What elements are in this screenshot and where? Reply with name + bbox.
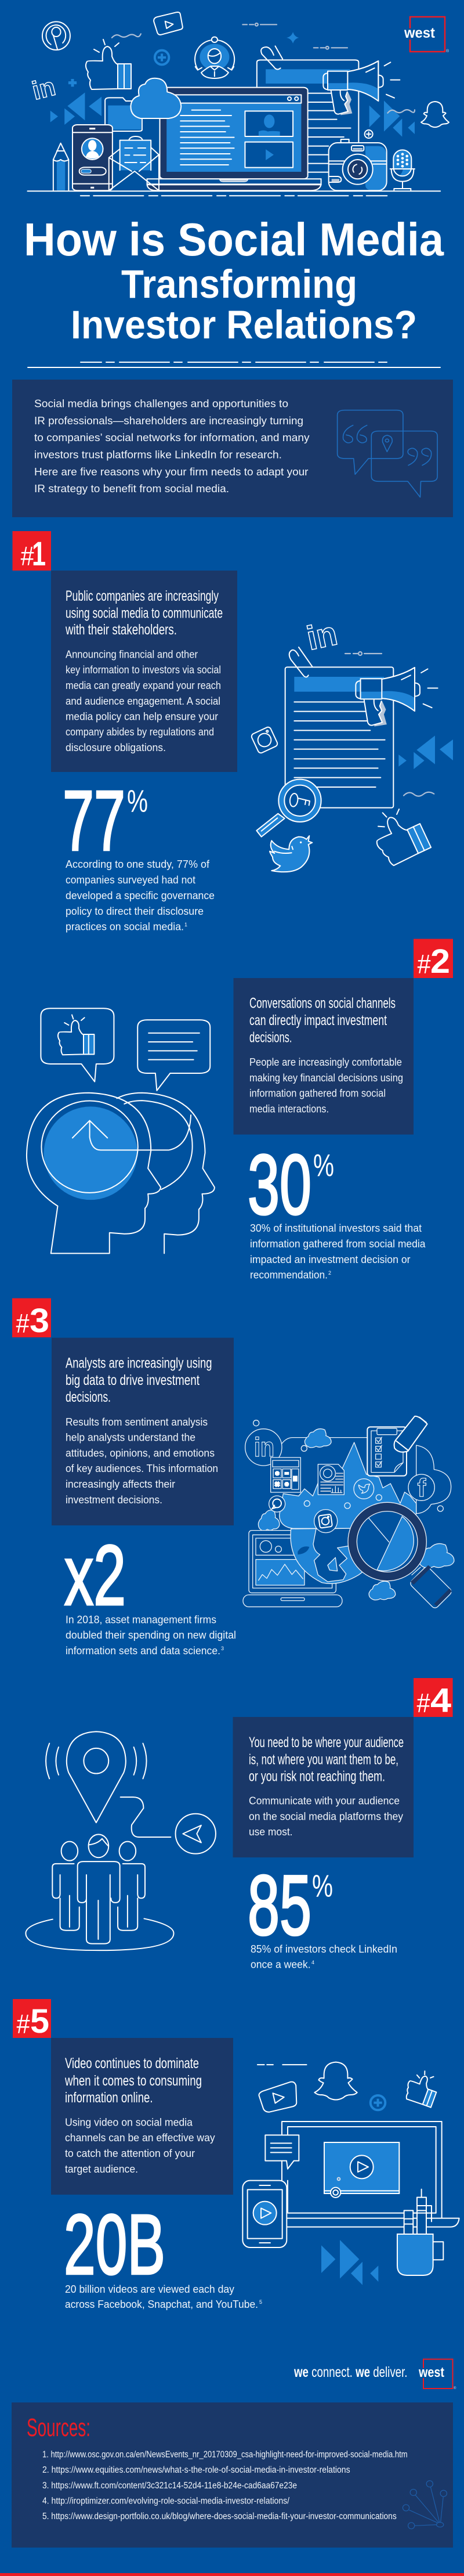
phone (242, 2181, 287, 2247)
panel: reason 1 (51, 571, 237, 772)
blue triangles (398, 735, 453, 769)
logo: west (404, 17, 449, 53)
monitor (282, 2122, 459, 2227)
logo: west: ® (446, 49, 449, 53)
icon: snapchat (421, 102, 449, 127)
bottom red bar (0, 2573, 464, 2576)
dash mark (258, 2064, 307, 2065)
calculator (271, 1457, 300, 1492)
icon: paper clip (261, 46, 282, 70)
icon: linkedin: in (30, 73, 58, 106)
badge: #4: # (416, 1688, 430, 1718)
logo: west footer: west (418, 2365, 444, 2380)
stat: 30%: 30 (248, 1138, 311, 1233)
panel: reason 4 (233, 1717, 414, 1857)
stat text: once a week. (251, 1958, 311, 1971)
dash mark (345, 652, 382, 655)
icon: twitter (270, 836, 312, 872)
logo: west footer (418, 2359, 456, 2390)
heading (64, 2055, 202, 2106)
squiggle (404, 792, 434, 796)
icon: thumbs up (86, 39, 131, 89)
section 3 (12, 1298, 454, 1657)
squiggle (387, 110, 415, 113)
stat text: information gathered from social media (250, 1238, 426, 1250)
stat: 85%: 85 (248, 1858, 311, 1953)
heads (27, 1093, 215, 1253)
stat: 30%: % (313, 1148, 334, 1183)
icon: pinterest (42, 21, 70, 50)
badge: #5: # (16, 2009, 30, 2039)
cloud connector (160, 118, 161, 179)
body (249, 1795, 404, 1838)
pin (67, 1731, 126, 1823)
body: information gathered from social (249, 1087, 386, 1099)
panel: reason 3 (52, 1338, 234, 1525)
stat text: 30% of institutional investors said that (250, 1222, 422, 1234)
badge: #1 (13, 531, 51, 573)
icon: twitter circle (354, 1479, 374, 1499)
heading: Public companies are increasingly (66, 588, 219, 604)
stat text: According to one study, 77% of (66, 858, 210, 870)
icon: thumbs up (58, 1015, 94, 1055)
sources list: 1. http://www.osc.gov.on.ca/en/NewsEvents_nr_20170309_csa-highlight-need-for-improved-social-media.htm (42, 2450, 408, 2460)
title: How is Social Media (24, 214, 444, 265)
body: to catch the attention of your (65, 2147, 195, 2159)
clipboard (367, 1427, 407, 1476)
comment bubble (265, 2135, 299, 2169)
stat text: 3 (221, 1646, 224, 1651)
sources list (42, 2450, 408, 2521)
phone (72, 125, 113, 190)
badge: #5: 5 (30, 2003, 49, 2040)
icon: microphone (390, 150, 415, 190)
heading (65, 588, 223, 638)
globe (291, 1528, 374, 1583)
laptop (243, 1531, 342, 1607)
intro text: IR strategy to benefit from social media. (34, 482, 229, 495)
ground line (27, 190, 440, 192)
icon: snapchat (314, 2062, 357, 2100)
icon: linkedin letters: in (254, 1432, 274, 1462)
section 2 (27, 939, 453, 1281)
body: media interactions. (249, 1102, 329, 1114)
stat: 77%: % (127, 784, 148, 819)
stat text (66, 858, 215, 933)
heading: Video continues to dominate (65, 2055, 199, 2072)
body: Results from sentiment analysis (66, 1416, 208, 1428)
dots (304, 1495, 443, 1511)
icon: thumbs up (366, 800, 432, 868)
stat text: information sets and data science. (66, 1644, 220, 1657)
laptop (147, 88, 321, 190)
heading: decisions. (66, 1389, 111, 1405)
body: investment decisions. (66, 1493, 162, 1506)
intro text: investors trust platforms like LinkedIn for research. (34, 449, 282, 461)
icon: megaphone (323, 61, 400, 115)
ground ellipse (26, 1918, 173, 1950)
mountain shape (280, 1442, 416, 1528)
intro text: Social media brings challenges and opportunities to (34, 398, 288, 410)
stat: x2: x2 (64, 1528, 126, 1623)
blue triangles (321, 2240, 378, 2285)
badge: #3: 3 (30, 1302, 49, 1340)
badge: #3 (12, 1298, 51, 1340)
heading: using social media to communicate (66, 605, 223, 622)
body: use most. (249, 1825, 292, 1838)
stat text: 1 (184, 922, 187, 928)
mug (397, 2234, 443, 2275)
illustration: document and megaphone (251, 614, 453, 872)
section 4 (26, 1678, 453, 1971)
blue triangles (369, 100, 415, 137)
heading: information online. (65, 2090, 153, 2106)
icon: profile with arrows (195, 37, 234, 78)
panel: intro (12, 380, 453, 517)
stat text (251, 1943, 397, 1971)
report document (318, 1464, 344, 1495)
sources list: 2. https://www.equities.com/news/what-s-the-role-of-social-media-in-investor-relations (42, 2465, 350, 2475)
stat text: impacted an investment decision or (250, 1253, 411, 1265)
body: media can greatly expand your reach (66, 679, 221, 691)
connector line (121, 1797, 171, 1837)
body: on the social media platforms they (249, 1810, 404, 1823)
logo: west: west (404, 25, 436, 41)
icon: linkedin circle (245, 1420, 307, 1466)
icon: instagram (251, 726, 278, 754)
icon: blue plus (68, 50, 169, 86)
icon: facebook letter: f (418, 1474, 426, 1502)
body: Announcing financial and other (66, 648, 198, 660)
badge: #1: # (20, 541, 34, 571)
background outlines (281, 1438, 451, 1514)
heading (249, 995, 396, 1045)
icon: sparkle (287, 32, 299, 44)
body: and audience engagement. A social (66, 695, 220, 707)
illustration: location pin and audience (26, 1731, 216, 1950)
heading: Analysts are increasingly using (66, 1355, 212, 1371)
envelope (109, 136, 159, 190)
icon: video play (154, 12, 183, 35)
body: help analysts understand the (66, 1431, 195, 1444)
sources list: 3. https://www.ft.com/content/3c321c14-52d4-11e8-b24e-cad6aa67e23e (42, 2481, 297, 2491)
stat text: developed a specific governance (66, 889, 215, 901)
icon: plus (371, 2095, 385, 2110)
icon: facebook circle (408, 1474, 434, 1500)
pencil (394, 1416, 427, 1452)
body: company abides by regulations and (66, 726, 214, 738)
heading (66, 1355, 212, 1405)
sources heading: Sources: (27, 2413, 90, 2442)
stat text: companies surveyed had not (66, 874, 195, 886)
stat text: practices on social media. (66, 921, 184, 933)
panel: sources (12, 2402, 453, 2548)
magnifier with pie chart (348, 1502, 453, 1610)
folder (105, 98, 142, 131)
stat text: 4 (311, 1960, 314, 1965)
body: key information to investors via social (66, 663, 221, 676)
navigation circle (176, 1814, 216, 1854)
section 5 (13, 1999, 459, 2310)
stat text: across Facebook, Snapchat, and YouTube. (65, 2298, 258, 2310)
intro text: to companies’ social networks for information, and many (34, 431, 310, 443)
sources list: 4. http://iroptimizer.com/evolving-role-social-media-investor-relations/ (42, 2496, 290, 2506)
stat text: recommendation. (250, 1269, 328, 1281)
heading: is, not where you want them to be, (249, 1752, 398, 1768)
heading: Conversations on social channels (249, 995, 396, 1011)
body (65, 2116, 215, 2175)
stat text (66, 1613, 236, 1657)
stat text: 85% of investors check LinkedIn (251, 1943, 397, 1955)
body: Communicate with your audience (249, 1795, 400, 1807)
stat: 20B: 20B (64, 2198, 165, 2293)
signal waves (46, 1743, 147, 1778)
section 1 (13, 531, 453, 933)
stat: 77%: 77 (63, 773, 125, 868)
title (24, 214, 444, 347)
body: attitudes, opinions, and emotions (66, 1446, 215, 1459)
speech bubble: like (41, 1008, 114, 1082)
body: disclosure obligations. (66, 741, 166, 753)
icon: whatsapp (269, 1496, 285, 1512)
heading: big data to drive investment (66, 1372, 200, 1388)
icon: video play (259, 2082, 296, 2112)
title: Transforming (121, 262, 357, 306)
body: Using video on social media (65, 2116, 193, 2128)
body: media policy can help ensure your (66, 710, 218, 723)
audience people (52, 1834, 145, 1944)
illustration: heads and speech bubbles (27, 1008, 215, 1253)
icon: plus (365, 130, 373, 138)
intro text: IR professionals—shareholders are increasingly turning (34, 414, 303, 427)
body (249, 1056, 403, 1114)
stat text: 2 (328, 1270, 331, 1276)
body: making key financial decisions using (249, 1071, 403, 1084)
heading: with their stakeholders. (65, 622, 177, 638)
body: People are increasingly comfortable (249, 1056, 402, 1068)
icon: magnifier with key (256, 780, 321, 837)
speech bubble: text (137, 1020, 210, 1091)
badge: #2: 2 (430, 943, 450, 980)
intro text (34, 398, 310, 495)
sources list: 5. https://www.design-portfolio.co.uk/blog/where-does-social-media-fit-your-investor-communications (42, 2512, 397, 2521)
badge: #1: 1 (32, 535, 46, 573)
stat: 85%: % (312, 1869, 333, 1904)
icon: linkedin: in (303, 614, 340, 658)
icon: network (403, 2481, 447, 2529)
body: of key audiences. This information (66, 1462, 218, 1474)
heading: when it comes to consuming (64, 2073, 202, 2089)
icon: megaphone (356, 668, 438, 726)
stat text: doubled their spending on new digital (66, 1629, 236, 1641)
cloud (130, 78, 181, 118)
logo: west footer: ® (454, 2386, 456, 2390)
stat text: 5 (259, 2299, 262, 2305)
hero illustration (27, 12, 449, 196)
stat text: 20 billion videos are viewed each day (65, 2283, 235, 2295)
illustration: big data (243, 1416, 454, 1610)
icon: instagram circle (314, 1510, 338, 1533)
badge: #2 (414, 939, 453, 980)
badge: #5 (13, 1999, 51, 2040)
title: Investor Relations? (71, 302, 417, 347)
decorative dash marks (112, 23, 347, 49)
illustration: video (242, 2062, 459, 2285)
clouds (258, 1429, 454, 1600)
heading (249, 1734, 404, 1784)
badge: #4: 4 (430, 1682, 451, 1719)
panel: reason 5 (51, 2038, 233, 2195)
title rule (28, 362, 440, 367)
stat text (65, 2283, 262, 2310)
tagline: we connect. we deliver. (293, 2364, 407, 2380)
body: target audience. (65, 2163, 138, 2175)
panel: reason 2 (233, 978, 414, 1135)
heading: or you risk not reaching them. (249, 1768, 385, 1784)
body: increasingly affects their (66, 1478, 175, 1490)
stat text: policy to direct their disclosure (66, 905, 204, 917)
icon: paper clip (289, 647, 312, 677)
body (66, 1416, 218, 1506)
icon: thumbs up (403, 2067, 442, 2108)
chevrons left (50, 92, 102, 125)
badge: #2: # (417, 949, 431, 979)
stat text (250, 1222, 426, 1281)
badge: #3: # (16, 1308, 30, 1338)
document (285, 667, 393, 808)
dotted document behind laptop (257, 60, 358, 172)
heading: decisions. (249, 1029, 292, 1045)
icon: chat bubbles (338, 410, 437, 497)
badge: #4 (414, 1678, 453, 1719)
intro text: Here are five reasons why your firm needs to adapt your (34, 466, 309, 478)
stat text: In 2018, asset management firms (66, 1613, 216, 1625)
pencil (53, 143, 68, 190)
pens (404, 2189, 432, 2234)
body (66, 648, 221, 753)
blue brain (44, 1106, 137, 1200)
body: channels can be an effective way (65, 2131, 215, 2144)
icon: camera (329, 139, 387, 190)
heading: can directly impact investment (249, 1012, 387, 1029)
